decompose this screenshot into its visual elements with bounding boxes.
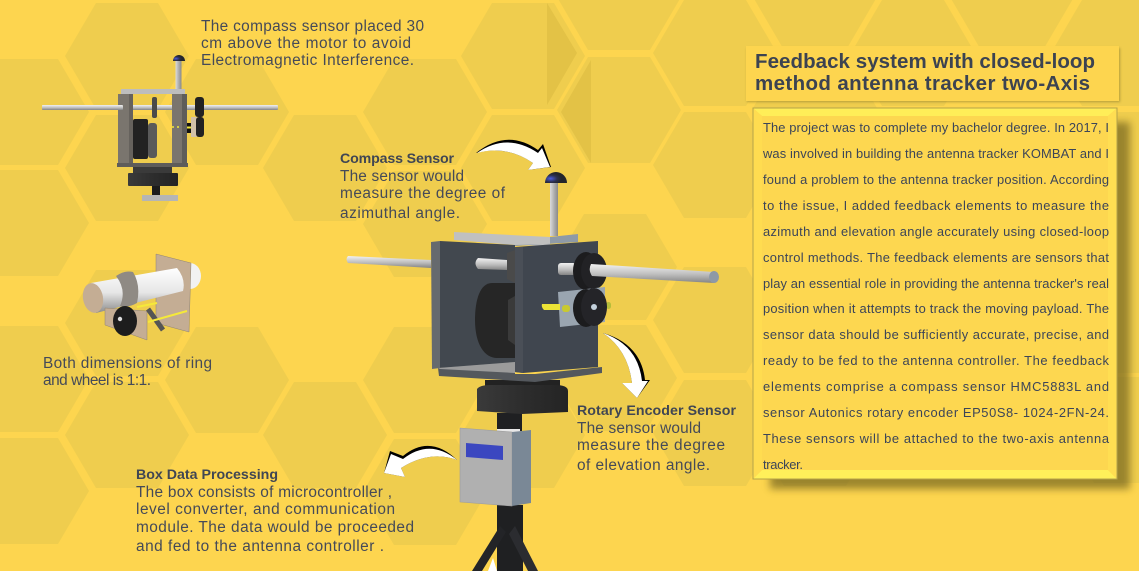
text block: position when it attempts to track the moving payload. The (763, 301, 1109, 316)
arrow: to data box (384, 446, 457, 477)
panel: title (746, 46, 1120, 102)
label: box data processing: level converter, and communication (136, 501, 395, 518)
text block: tracker. (763, 457, 803, 472)
label: rotary encoder sensor: of elevation angle. (577, 457, 710, 474)
text: compass placement note: Electromagnetic Interference. (201, 52, 414, 69)
text block: play an essential role in providing the antenna tracker's real (763, 276, 1109, 291)
ring and wheel illustration (81, 254, 201, 340)
label: compass sensor: azimuthal angle. (340, 205, 460, 222)
label: compass sensor: Compass Sensor (340, 151, 454, 167)
text block: sensor Autonics rotary encoder EP50S8- 1024-2FN-24. (763, 405, 1109, 420)
label: rotary encoder sensor: measure the degree (577, 437, 725, 454)
text block: ready to be fed to the antenna controller. The feedback (763, 353, 1110, 368)
arrow: to compass sensor (476, 140, 551, 170)
label: compass sensor: measure the degree of (340, 185, 506, 202)
heading: method antenna tracker two-Axis (755, 72, 1090, 95)
text: ring and wheel note (43, 355, 212, 389)
icon: bracket frame (431, 241, 602, 382)
text block: The project was to complete my bachelor degree. In 2017, I (763, 120, 1109, 135)
label: box data processing (136, 467, 414, 555)
icon: tripod and pole (472, 505, 538, 571)
label: compass sensor (340, 151, 506, 222)
text block: control methods. The feedback elements are sensors that (763, 250, 1109, 265)
label: rotary encoder sensor (577, 403, 736, 474)
text block: was involved in building the antenna tracker KOMBAT and I (762, 146, 1109, 161)
top-view tracker illustration (42, 55, 278, 201)
icon: top plate (454, 232, 578, 246)
text block: These sensors will be attached to the two-axis antenna (763, 431, 1110, 446)
text: compass placement note: cm above the motor to avoid (201, 35, 411, 52)
text: compass placement note: The compass sensor placed 30 (201, 18, 424, 35)
text: ring and wheel note: Both dimensions of ring (43, 355, 212, 372)
icon: base disc (477, 380, 568, 414)
heading (755, 50, 1095, 95)
main tracker illustration (346, 172, 719, 571)
arrow: to rotary encoder (603, 333, 650, 398)
heading: Feedback system with closed-loop (755, 50, 1095, 73)
text block: found a problem to the antenna tracker position. According (763, 172, 1109, 187)
text block: azimuth and elevation angle accurately using closed-loop (763, 224, 1109, 239)
icon: shaft and wheel (558, 252, 719, 290)
text block: elements comprise a compass sensor HMC5883L and (763, 379, 1109, 394)
label: rotary encoder sensor: The sensor would (577, 420, 701, 437)
label: rotary encoder sensor: Rotary Encoder Sensor (577, 403, 736, 419)
label: box data processing: module. The data would be proceeded (136, 519, 414, 536)
panel: project description (753, 108, 1130, 489)
text block (762, 120, 1110, 472)
icon: compass mast (545, 172, 567, 236)
icon: left rod (346, 256, 431, 268)
text block: to the issue, I added feedback elements to measure the (763, 198, 1109, 213)
label: box data processing: The box consists of microcontroller , (136, 484, 392, 501)
label: box data processing: Box Data Processing (136, 467, 278, 483)
label: box data processing: and fed to the antenna controller . (136, 538, 384, 555)
text block: sensor data should be sufficiently accurate, precise, and (763, 327, 1109, 342)
icon: rotary encoder (542, 287, 611, 327)
icon: data processing box (460, 428, 531, 506)
text: compass placement note (201, 18, 424, 69)
icon: compass dome and mast (173, 55, 185, 90)
text: ring and wheel note: and wheel is 1:1. (43, 372, 151, 389)
label: compass sensor: The sensor would (340, 168, 464, 185)
